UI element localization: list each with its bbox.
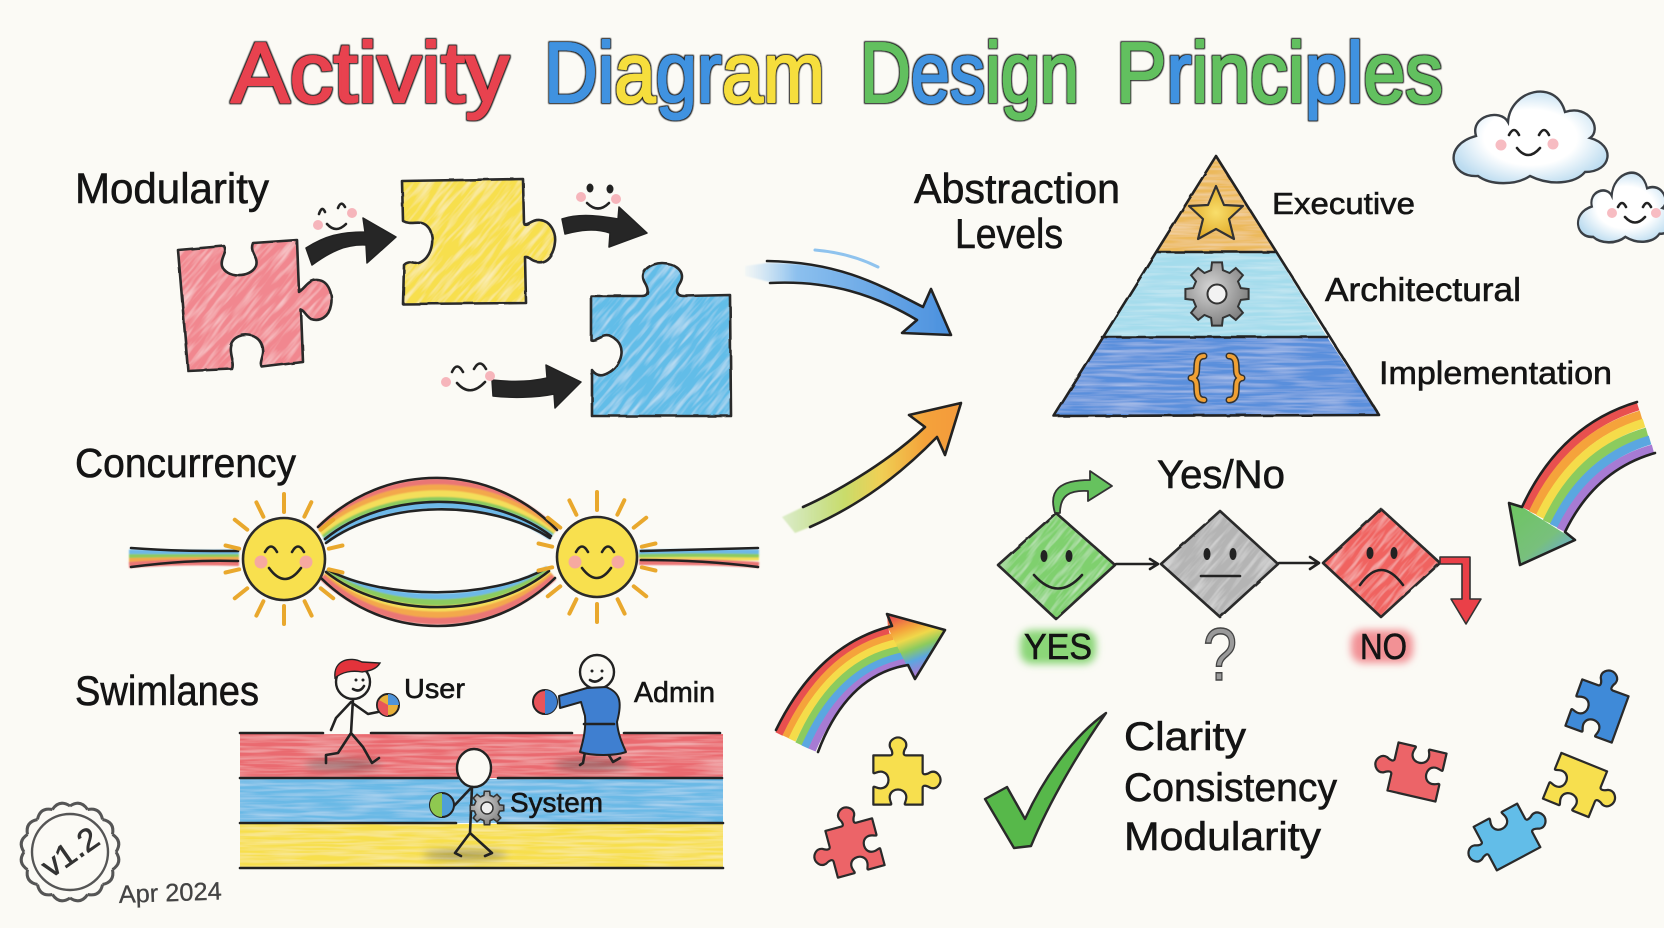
checklist text: Consistency [1124, 766, 1337, 810]
label: no: NO [1360, 626, 1407, 667]
version badge [18, 800, 122, 904]
lane bands [240, 734, 723, 868]
title: Design [860, 26, 1079, 121]
title: Principles [1116, 26, 1443, 121]
cloud large [1454, 92, 1608, 183]
pyramid [1054, 156, 1379, 416]
arrow: rainbow right [1509, 402, 1655, 565]
arrow: blue curved [745, 250, 951, 335]
rainbow flow lines [129, 482, 759, 621]
icon: star [1189, 186, 1243, 239]
heading: Modularity: Modularity [75, 165, 269, 213]
date: Apr 2024 [118, 877, 222, 909]
arrow: unknown to no [1279, 557, 1319, 569]
arrow: yes to unknown [1116, 559, 1158, 569]
checklist text [1124, 715, 1337, 859]
panel: swimlanes [75, 655, 723, 868]
diamond: no [1270, 451, 1493, 675]
yellow puzzle piece [340, 104, 617, 379]
red puzzle piece [113, 164, 396, 447]
actor: admin [533, 655, 715, 765]
smiley faces [313, 184, 621, 390]
title [231, 26, 1443, 121]
actor: system [430, 749, 603, 856]
panel: concurrency [75, 440, 759, 626]
pyramid labels [1272, 186, 1612, 391]
heading: abstraction levels: Abstraction [914, 165, 1120, 212]
cloud small [1578, 173, 1664, 242]
panel: abstraction levels [914, 156, 1612, 416]
pyramid labels: Implementation [1379, 355, 1612, 391]
diamond: yes [946, 455, 1167, 677]
title: Activity [231, 26, 510, 121]
label: user: User [404, 673, 465, 704]
icon: braces [1191, 356, 1242, 400]
heading: yes/no: Yes/No [1157, 453, 1285, 497]
black arrows [306, 207, 647, 408]
heading: Swimlanes: Swimlanes [75, 667, 259, 714]
arrow: rainbow left [776, 614, 945, 752]
label: admin: Admin [634, 677, 715, 709]
version badge: v1.2 [34, 819, 106, 885]
icon: gear [1185, 262, 1249, 326]
checklist text: Modularity [1124, 815, 1321, 859]
arrow: red elbow [1440, 557, 1481, 624]
left sun [226, 494, 342, 624]
arrow: orange curved [782, 403, 961, 533]
pyramid labels: Executive [1272, 186, 1415, 221]
actor shadows [305, 759, 630, 860]
label: yes: YES [1024, 626, 1092, 667]
checkmark [985, 713, 1106, 848]
heading: abstraction levels [914, 165, 1120, 257]
pyramid labels: Architectural [1325, 271, 1521, 308]
heading: abstraction levels: Levels [955, 210, 1063, 257]
label: question: ? [1203, 613, 1237, 696]
title: Diagram [544, 26, 825, 121]
checklist text: Clarity [1124, 715, 1246, 759]
scattered puzzle pieces [804, 663, 1635, 882]
lane lines [240, 733, 723, 868]
diamond: unknown [1109, 453, 1330, 675]
panel: decisions [946, 451, 1493, 696]
actor: user [326, 659, 465, 763]
heading: Concurrency: Concurrency [75, 440, 296, 486]
panel: modularity [75, 104, 806, 485]
blue puzzle piece [516, 194, 806, 485]
right sun [539, 492, 655, 622]
arrow: green curved [1053, 471, 1112, 513]
label: system: System [510, 787, 603, 818]
